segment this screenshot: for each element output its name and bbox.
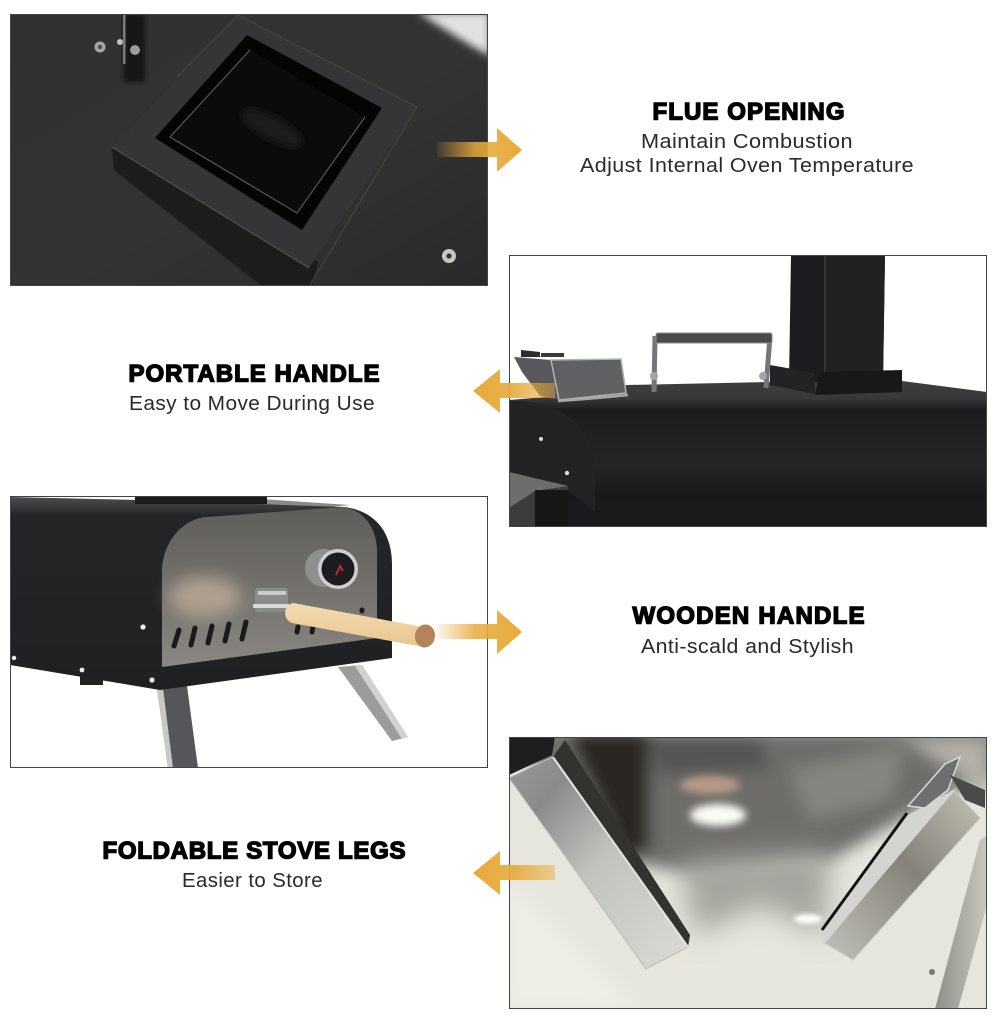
description: Maintain Combustion [641, 131, 853, 153]
panel: foldable stove legs photo [509, 730, 995, 1009]
floor light area [509, 880, 640, 1009]
rear leg [338, 665, 408, 741]
description: Easy to Move During Use [129, 393, 375, 415]
text: wooden handle [632, 602, 864, 658]
door tray [514, 350, 628, 401]
door latch [253, 588, 289, 612]
far right rail [935, 835, 987, 1009]
top-right light reflection [417, 12, 490, 56]
foot [80, 676, 103, 685]
washer [442, 249, 456, 263]
flue side wall [112, 147, 318, 286]
inner highlight edges [170, 50, 365, 213]
frame front edge [112, 147, 309, 268]
panel: portable handle photo [509, 255, 987, 527]
side rivets [539, 437, 569, 475]
front leg [157, 686, 198, 768]
mid-tone smear [680, 850, 830, 935]
copper reflection [680, 776, 740, 794]
wooden handle [285, 603, 437, 649]
arrow: wooden handle [437, 610, 522, 654]
bolts and bracket [94, 14, 145, 82]
warm reflection [169, 577, 241, 617]
description line 2: Adjust Internal Oven Temperature [580, 155, 914, 177]
description: Anti-scald and Stylish [641, 636, 854, 658]
arrow: flue opening [437, 128, 522, 172]
chimney [770, 255, 902, 395]
panel: wooden handle photo [10, 496, 488, 768]
heading: FLUE OPENING [652, 98, 844, 126]
handle [650, 333, 772, 392]
description: Easier to Store [182, 870, 323, 892]
oven body [509, 381, 987, 527]
right folded leg [794, 757, 985, 960]
upper right light steel [900, 737, 990, 800]
panel: flue opening photo [10, 12, 490, 286]
text: flue opening [580, 98, 914, 177]
chimney foot [135, 497, 267, 504]
ash speckle inside flue [243, 110, 301, 146]
white reflection [690, 804, 746, 826]
frame outline [177, 15, 417, 285]
screw [929, 969, 935, 975]
thermometer [305, 549, 358, 589]
arrow: portable handle [473, 369, 555, 413]
heading: PORTABLE HANDLE [128, 360, 380, 388]
lower box [509, 472, 568, 527]
flue opening [155, 35, 382, 230]
flue outer frame [114, 147, 372, 268]
arrow: foldable legs [473, 851, 555, 895]
body rivets [12, 624, 155, 683]
heading: WOODEN HANDLE [632, 602, 864, 630]
top steel wedge [260, 500, 350, 506]
flue inner box [170, 50, 365, 213]
steel front plate [162, 507, 377, 667]
vent slots [174, 610, 362, 646]
text: portable handle [128, 360, 380, 415]
text: foldable legs [102, 838, 406, 892]
left folded leg [509, 737, 690, 969]
heading: FOLDABLE STOVE LEGS [102, 838, 406, 864]
oven body [10, 497, 392, 690]
arched side panel [509, 401, 595, 512]
dark steel reflection [509, 730, 995, 875]
